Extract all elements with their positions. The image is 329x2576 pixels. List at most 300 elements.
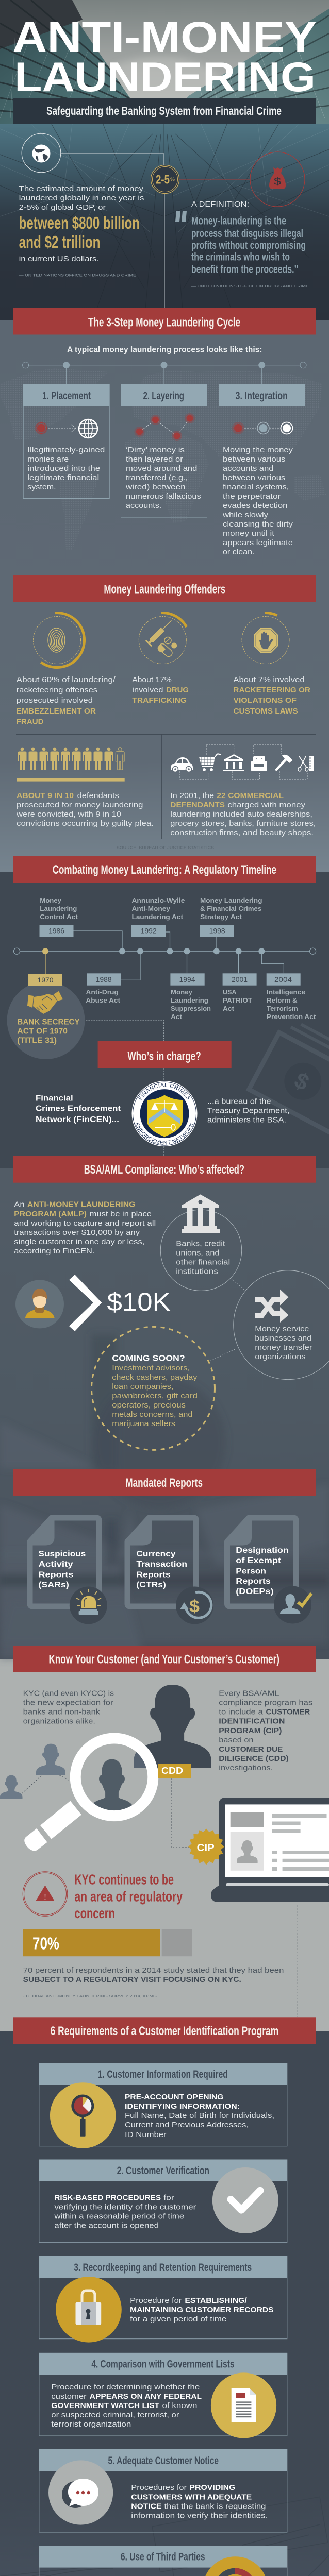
text: conviction rate: defendants <box>77 791 119 800</box>
text: FinCEN: Network (FinCEN)... <box>36 1115 119 1124</box>
icon: money bag: $ <box>274 176 281 188</box>
heading: mandated reports: Mandated Reports <box>125 1476 203 1490</box>
card: integration: between various <box>223 455 285 464</box>
card: integration: 3. Integration <box>235 390 288 402</box>
card: customer verification: verifying the identity of the customer <box>54 2203 196 2212</box>
card: layering: accounts. <box>126 501 161 510</box>
text: AML program: An <box>14 1200 25 1209</box>
year labels: 1992 <box>141 927 157 935</box>
card: government lists: APPEARS ON ANY FEDERAL <box>90 2392 202 2401</box>
report: DOEPs: Reports <box>236 1577 271 1586</box>
text block: definition: the criminals who wish to <box>191 251 290 263</box>
heading: regulatory concern: an area of regulatory <box>74 1888 183 1904</box>
text block: global estimate: The estimated amount of money <box>19 184 144 193</box>
act names: Strategy Act <box>200 913 242 921</box>
background icon: banknote <box>249 1017 329 1140</box>
icon: magnifier pie chart <box>71 2095 94 2137</box>
report: DOEPs: Designation <box>236 1546 289 1555</box>
bubble: money service businesses: organizations <box>255 1352 306 1361</box>
bubble: banks: institutions <box>176 1267 218 1276</box>
text: racketeering or customs: VIOLATIONS OF <box>233 696 297 705</box>
year labels: 2001 <box>232 976 248 984</box>
chart: 70 percent bar <box>23 1929 192 1956</box>
text: KYC expectation: organizations alike. <box>23 1717 95 1726</box>
card: integration: money until it <box>223 529 275 538</box>
card: layering: wired) between <box>125 483 186 492</box>
text: AML program: must be in place <box>90 1210 152 1218</box>
heading: who's in charge: Who’s in charge? <box>127 1049 201 1063</box>
text: CIP and CDD: CUSTOMER DUE <box>219 1745 283 1754</box>
chart: 7 percent ring with stop sign <box>242 613 289 664</box>
text block: global estimate: 2-5% of global GDP, or <box>19 203 106 212</box>
card: placement: system. <box>27 483 56 492</box>
callout: Bank Secrecy Act 1970: BANK SECRECY <box>17 1018 80 1026</box>
text: embezzlement or fraud: About 60% of laundering/ <box>17 675 116 684</box>
icon: speech bubbles <box>62 2479 98 2508</box>
text: CIP and CDD <box>219 1689 312 1772</box>
text: CIP and CDD: based on <box>219 1736 254 1744</box>
text: drug trafficking: DRUG <box>166 686 189 694</box>
report: SARs: Suspicious <box>38 1550 86 1558</box>
icon: syringe and pills <box>145 618 177 658</box>
icon: armchair <box>251 756 267 771</box>
act names <box>40 896 316 1021</box>
report: SARs: (SARs) <box>38 1581 69 1589</box>
act names: Reform & <box>267 996 297 1004</box>
text: KPMG study: SUBJECT TO A REGULATORY VISIT FOCUSING ON KYC. <box>23 1975 241 1984</box>
card: third parties <box>39 2546 287 2576</box>
card: layering: numerous fallacious <box>126 492 201 501</box>
card: recordkeeping <box>39 2256 287 2343</box>
heading: offenders <box>13 575 316 602</box>
card: government lists: customer <box>51 2392 87 2401</box>
act names: Intelligence <box>267 988 305 996</box>
text block: definition <box>175 200 309 289</box>
card: customer verification: within a reasonable period of time <box>54 2212 184 2221</box>
icon: check mark <box>212 2167 278 2233</box>
bubble: banks: Banks, credit <box>176 1239 225 1248</box>
text: KPMG study <box>23 1966 284 1998</box>
year labels: 1988 <box>96 976 112 984</box>
text: CIP and CDD: CUSTOMER <box>266 1708 310 1717</box>
text: commercial defendants: In 2001, the <box>170 791 214 800</box>
text: embezzlement or fraud: racketeering offenses <box>17 686 97 694</box>
subtitle banner <box>13 98 316 124</box>
heading: regulatory concern <box>74 1871 183 1921</box>
card: integration: the perpetrator <box>223 492 281 501</box>
text: CIP and CDD: compliance program has <box>219 1699 312 1707</box>
year labels <box>48 927 292 984</box>
heading: regulatory concern: concern <box>74 1905 115 1921</box>
title: Anti-Money Laundering: LAUNDERING <box>14 54 316 100</box>
card: placement: introduced into the <box>27 464 100 473</box>
callout: coming soon: operators, precious <box>112 1401 186 1410</box>
year labels: 1986 <box>48 927 64 935</box>
emblem: FinCEN seal: ENFORCEMENT NETWORK <box>135 1122 194 1145</box>
card: third parties: 6. Use of Third Parties <box>121 2551 205 2563</box>
card: integration: appears legitimate <box>223 538 293 547</box>
text: commercial defendants: charged with money <box>227 801 306 809</box>
callout: coming soon: loan companies, <box>112 1382 173 1391</box>
card: layering <box>121 384 207 517</box>
heading: 6 requirements <box>13 2017 316 2044</box>
icon: scissors and comb <box>298 756 314 771</box>
heading: who's affected <box>13 1156 316 1183</box>
icon: shuffle arrows <box>255 1290 288 1323</box>
chart: 60 percent ring with fingerprint <box>33 613 85 667</box>
text: CIP and CDD: PROGRAM (CIP) <box>219 1726 282 1735</box>
icon: fingerprint <box>48 628 65 652</box>
text: bureau of the Treasury: ...a bureau of the <box>207 1097 271 1106</box>
icon: warning <box>23 1872 68 1916</box>
bubble: banks: other financial <box>176 1258 230 1266</box>
chart: 17 percent ring with syringe <box>139 613 187 664</box>
card: integration: accounts and <box>223 464 273 473</box>
card: recordkeeping: MAINTAINING CUSTOMER RECORDS <box>130 2306 273 2314</box>
title: Anti-Money Laundering <box>12 13 317 100</box>
card: integration <box>219 384 305 563</box>
card: placement <box>23 384 109 499</box>
callout: Bank Secrecy Act 1970: ACT OF 1970 <box>17 1027 68 1036</box>
text block: global estimate: and $2 trillion <box>19 232 100 251</box>
text: racketeering or customs: RACKETEERING OR <box>233 686 310 694</box>
act names: USA <box>223 988 237 996</box>
report: CTRs <box>127 1518 213 1624</box>
text: racketeering or customs: About 7% involved <box>233 675 305 684</box>
act names: Terrorism <box>267 1005 298 1012</box>
text: FinCEN: Crimes Enforcement <box>36 1105 121 1113</box>
background photo: pen and magnifier <box>0 1334 329 1659</box>
callout: Bank Secrecy Act 1970: (TITLE 31) <box>17 1037 57 1045</box>
badge: CIP <box>188 1828 224 1865</box>
callout: coming soon <box>92 1327 215 1450</box>
bubble: money service businesses <box>234 1270 329 1380</box>
text: commercial defendants: laundering included auto dealerships, <box>170 810 312 819</box>
connector lines: hero <box>61 154 250 308</box>
report: CTRs: (CTRs) <box>136 1581 166 1589</box>
card: government lists: terrorist organization <box>51 2420 131 2429</box>
text: KYC expectation <box>23 1689 114 1726</box>
text: bureau of the Treasury: administers the BSA. <box>207 1116 286 1125</box>
timeline axis <box>13 931 316 980</box>
text: conviction rate <box>16 791 154 828</box>
text: commercial defendants: DEFENDANTS <box>170 801 225 809</box>
card: placement: legitimate financial <box>27 473 99 482</box>
text: racketeering or customs: CUSTOMS LAWS <box>233 707 298 716</box>
heading: 3-step cycle <box>13 308 316 335</box>
card: layering: ‘Dirty’ money is <box>126 446 185 454</box>
background icon: banknote: $ <box>290 1067 313 1096</box>
card: government lists: 4. Comparison with Government Lists <box>91 2359 234 2370</box>
text: KYC expectation: the new expectation for <box>23 1699 113 1707</box>
card: layering: 2. Layering <box>143 390 184 402</box>
card: placement: 1. Placement <box>42 390 91 402</box>
report: SARs: Activity <box>38 1560 73 1569</box>
text: AML program: ANTI-MONEY LAUNDERING <box>27 1200 135 1209</box>
card: integration: Moving the money <box>223 446 293 454</box>
icons: commercial defendants <box>171 744 314 779</box>
text: AML program: transactions over $10,000 by any <box>14 1228 140 1237</box>
year labels: 1994 <box>179 976 195 984</box>
text block: definition: A DEFINITION: <box>191 200 249 209</box>
card: customer verification: after the account is opened <box>54 2222 159 2230</box>
callout: coming soon: metals concerns, and <box>112 1410 193 1419</box>
heading: mandated reports <box>13 1469 316 1496</box>
act names: Control Act <box>40 913 78 921</box>
report: DOEPs: (DOEPs) <box>236 1587 273 1596</box>
text: KPMG study: 70 percent of respondents in a 2014 study stated that they had been <box>23 1966 284 1975</box>
icon: zig-zag transfers <box>134 413 195 441</box>
act names: Money <box>40 896 62 904</box>
text: CIP and CDD: Every BSA/AML <box>219 1689 279 1698</box>
card: recordkeeping: Procedure for <box>130 2296 182 2305</box>
act names: Suppression <box>171 1005 211 1012</box>
title: Anti-Money Laundering: ANTI-MONEY <box>12 13 317 61</box>
text: conviction rate: were convicted, with 9 in 10 <box>16 810 121 819</box>
callout: coming soon: marijuana sellers <box>112 1419 175 1428</box>
report: SARs <box>30 1518 107 1624</box>
report: DOEPs: of Exempt <box>236 1556 282 1565</box>
text: CIP and CDD: DILIGENCE (CDD) <box>219 1754 289 1763</box>
illustration: laptop with customer record <box>211 1798 329 1902</box>
card: integration: cleansing the dirty <box>223 520 293 529</box>
icon: bank <box>223 754 244 771</box>
icon: dot moving into globe <box>35 419 97 438</box>
card: customer notice: CUSTOMERS WITH ADEQUATE <box>131 2493 252 2502</box>
callout: coming soon: check cashers, payday <box>112 1373 198 1382</box>
callout: Bank Secrecy Act 1970 <box>7 974 85 1059</box>
text: KYC expectation: KYC (and even KYCC) is <box>23 1689 114 1698</box>
icon: padlock <box>75 2291 101 2325</box>
icon: document <box>232 2388 256 2422</box>
text: commercial defendants: 22 COMMERCIAL <box>217 791 284 800</box>
text: CIP and CDD: investigations. <box>219 1764 273 1772</box>
card: customer notice: Procedures for <box>131 2483 187 2492</box>
card: government lists: or suspected criminal, terrorist, or <box>51 2411 179 2419</box>
card: customer verification: for <box>163 2194 174 2202</box>
text: commercial defendants <box>170 791 316 837</box>
text: AML program: and working to capture and report all <box>14 1219 156 1228</box>
text: drug trafficking: About 17% <box>132 675 172 684</box>
icon: dollar cycle <box>180 1592 211 1618</box>
report: SARs: Reports <box>38 1570 74 1580</box>
callout: coming soon: pawnbrokers, gift card <box>112 1392 198 1400</box>
background: dotted world map <box>0 368 326 550</box>
icon: approved person <box>280 1594 311 1614</box>
text: commercial defendants: construction firms, and beauty shops. <box>170 828 314 837</box>
card: recordkeeping: 3. Recordkeeping and Retention Requirements <box>74 2262 252 2274</box>
report: CTRs: Reports <box>136 1570 171 1580</box>
card: integration: between various <box>223 473 285 482</box>
icon: bank building <box>182 1194 220 1233</box>
card: placement: monies are <box>27 455 69 464</box>
card: customer information: Full Name, Date of Birth for Individuals, <box>125 2111 274 2120</box>
report: DOEPs: Person <box>236 1567 266 1575</box>
act names: Laundering <box>171 996 208 1004</box>
text: AML program <box>14 1200 156 1256</box>
act names: Laundering <box>40 905 77 912</box>
emblem: FinCEN seal: FINANCIAL CRIMES <box>138 1083 190 1100</box>
heading: who's affected: BSA/AML Compliance: Who’s affected? <box>84 1163 244 1177</box>
text: drug trafficking <box>132 675 189 705</box>
card: layering: transferred (e.g., <box>126 473 188 482</box>
act names: PATRIOT <box>223 996 252 1004</box>
text: conviction rate: convictions occurring by guilty plea. <box>17 819 154 828</box>
text: FinCEN: Financial <box>36 1094 73 1103</box>
text block: global estimate: — UNITED NATIONS OFFICE ON DRUGS AND CRIME <box>19 274 136 277</box>
illustration: customer silhouettes under magnifier <box>0 1685 211 1851</box>
heading: regulatory concern: KYC continues to be <box>74 1871 174 1887</box>
card: government lists <box>39 2353 287 2438</box>
chart: 70 percent bar: 70% <box>32 1934 59 1953</box>
bubble: money service businesses: businesses and <box>255 1334 311 1343</box>
act names: Act <box>223 1005 235 1012</box>
callout: coming soon: COMING SOON? <box>112 1354 185 1363</box>
card: customer verification: 2. Customer Verification <box>117 2165 209 2177</box>
stat badge: 2-5%: 2-5 <box>156 173 170 187</box>
callout: Bank Secrecy Act 1970: 1970 <box>37 976 54 984</box>
card: government lists: of known <box>162 2401 197 2410</box>
act names: & Financial Crimes <box>200 905 261 912</box>
icon: dollar cycle: $ <box>189 1597 200 1616</box>
card: placement: Illegitimately-gained <box>27 446 105 454</box>
text: bureau of the Treasury: Treasury Department, <box>207 1107 289 1115</box>
card: customer notice: information to verify their identities. <box>131 2511 268 2520</box>
year labels: 1998 <box>209 927 225 935</box>
act names: Money Laundering <box>200 896 262 904</box>
act names: Anti-Drug <box>86 988 119 996</box>
emblem: FinCEN seal <box>132 1081 197 1147</box>
card: customer information: ID Number <box>125 2130 167 2139</box>
report: CTRs: Currency <box>136 1550 176 1558</box>
text block: definition: — UNITED NATIONS OFFICE ON DRUGS AND CRIME <box>191 285 309 289</box>
icon: customer over $10K <box>15 1275 171 1331</box>
text: drug trafficking: involved <box>132 686 163 694</box>
icon: gear donut <box>217 2571 253 2576</box>
card: customer notice <box>39 2449 287 2532</box>
card: customer information: 1. Customer Information Required <box>98 2069 228 2080</box>
card: layering: moved around and <box>126 464 197 473</box>
stat badge: 2-5% <box>151 165 179 194</box>
icon: hammer <box>275 755 292 771</box>
act names: Anti-Money <box>132 905 171 912</box>
text block: global estimate: laundered globally in one year is <box>19 194 144 202</box>
timeline: three steps <box>23 362 306 384</box>
bubble: banks: unions, and <box>176 1248 220 1257</box>
text: embezzlement or fraud: EMBEZZLEMENT OR <box>17 707 96 716</box>
stat badge: 2-5%: % <box>170 177 175 182</box>
icon: stop hand <box>254 628 278 653</box>
card: integration: financial systems, <box>223 483 289 492</box>
act names: Money <box>171 988 193 996</box>
report: CTRs: Transaction <box>136 1560 187 1569</box>
card: customer information: IDENTIFYING INFORMATION: <box>125 2102 240 2111</box>
year boxes <box>39 925 301 986</box>
icon: money bag <box>250 152 305 207</box>
text block: definition: benefit from the proceeds.” <box>191 264 298 276</box>
card: integration: or clean. <box>223 548 255 556</box>
text: process intro: A typical money laundering process looks like this: <box>67 346 262 354</box>
card: integration: evades detection <box>223 501 287 510</box>
icon: customer over $10K: $10K <box>107 1287 171 1316</box>
text: commercial defendants: grocery stores, banks, furniture stores, <box>170 819 316 828</box>
year labels: 2004 <box>274 976 292 984</box>
card: customer notice: 5. Adequate Customer Notice <box>108 2455 219 2467</box>
chart: regulatory timeline <box>13 896 316 1021</box>
text: embezzlement or fraud: prosecuted involved <box>17 696 93 705</box>
text: FinCEN <box>36 1094 121 1124</box>
icon: car <box>171 757 193 772</box>
card: customer information: PRE-ACCOUNT OPENING <box>125 2093 223 2102</box>
text: AML program: single customer in one day or less, <box>14 1238 144 1246</box>
heading: who's in charge <box>98 1041 232 1068</box>
text block: global estimate: in current US dollars. <box>19 255 99 263</box>
card: customer verification <box>39 2160 287 2243</box>
act names: Laundering Act <box>132 913 184 921</box>
text: AML program: according to FinCEN. <box>14 1247 94 1256</box>
text: conviction rate: prosecuted for money laundering <box>17 801 143 809</box>
card: customer verification: RISK-BASED PROCEDURES <box>54 2194 161 2202</box>
heading: 3-step cycle: The 3-Step Money Laundering Cycle <box>88 316 240 330</box>
icon: warning: ! <box>44 1893 46 1902</box>
text block: global estimate: between $800 billion <box>19 213 140 232</box>
icon: alarm siren <box>76 1589 101 1615</box>
bubble: banks <box>160 1194 242 1291</box>
text block: global estimate <box>19 184 144 277</box>
pictogram: 9 in 10 people <box>17 748 125 782</box>
card: customer notice: that the bank is requesting <box>164 2502 266 2511</box>
card: customer information: Current and Previous Addresses, <box>125 2121 249 2129</box>
text: KPMG study: - GLOBAL ANTI-MONEY LAUNDERING SURVEY 2014, KPMG <box>23 1995 157 1998</box>
card: customer information <box>39 2063 287 2148</box>
badge: CDD: CDD <box>161 1766 183 1776</box>
report: DOEPs <box>227 1518 311 1624</box>
card: recordkeeping: for a given period of time <box>130 2315 226 2324</box>
icon: dirty to clean dots <box>232 422 293 434</box>
heading: offenders: Money Laundering Offenders <box>104 583 225 597</box>
card: customer notice: PROVIDING <box>189 2483 235 2492</box>
card: integration: while slowly <box>222 511 269 519</box>
icon: magnifying glass <box>24 1733 159 1851</box>
callout: coming soon: Investment advisors, <box>112 1364 190 1372</box>
act names: Act <box>171 1013 183 1021</box>
card: government lists: Procedure for determining whether the <box>51 2383 200 2392</box>
icon: handshake <box>27 991 63 1014</box>
act names: Abuse Act <box>86 996 121 1004</box>
icon: shopping cart <box>199 754 221 771</box>
text: bureau of the Treasury <box>207 1097 289 1125</box>
heading: know your customer <box>13 1646 316 1672</box>
icon: globe <box>22 133 61 173</box>
text: racketeering or customs <box>233 675 310 716</box>
card: government lists: GOVERNMENT WATCH LIST <box>51 2401 159 2410</box>
panel: hero skyscraper photo <box>0 0 329 285</box>
text block: definition: Money-laundering is the <box>191 215 286 227</box>
text: KYC expectation: banks and non-bank <box>23 1708 101 1717</box>
card: layering: then layered or <box>126 455 183 464</box>
background photo: dollar bills <box>0 2497 329 2576</box>
text: CIP and CDD: IDENTIFICATION <box>219 1717 285 1726</box>
text: conviction rate: ABOUT 9 IN 10 <box>17 791 74 800</box>
act names: Prevention Act <box>267 1013 316 1021</box>
bubble: money service businesses: Money service <box>255 1325 309 1333</box>
source: BJS: SOURCE: BUREAU OF JUSTICE STATISTICS <box>117 846 214 850</box>
heading: regulatory timeline <box>13 856 316 883</box>
badge: CDD <box>158 1764 191 1848</box>
text: AML program: PROGRAM (AMLP) <box>14 1210 87 1218</box>
text: embezzlement or fraud: FRAUD <box>17 717 44 726</box>
act names: Annunzio-Wylie <box>132 896 185 904</box>
